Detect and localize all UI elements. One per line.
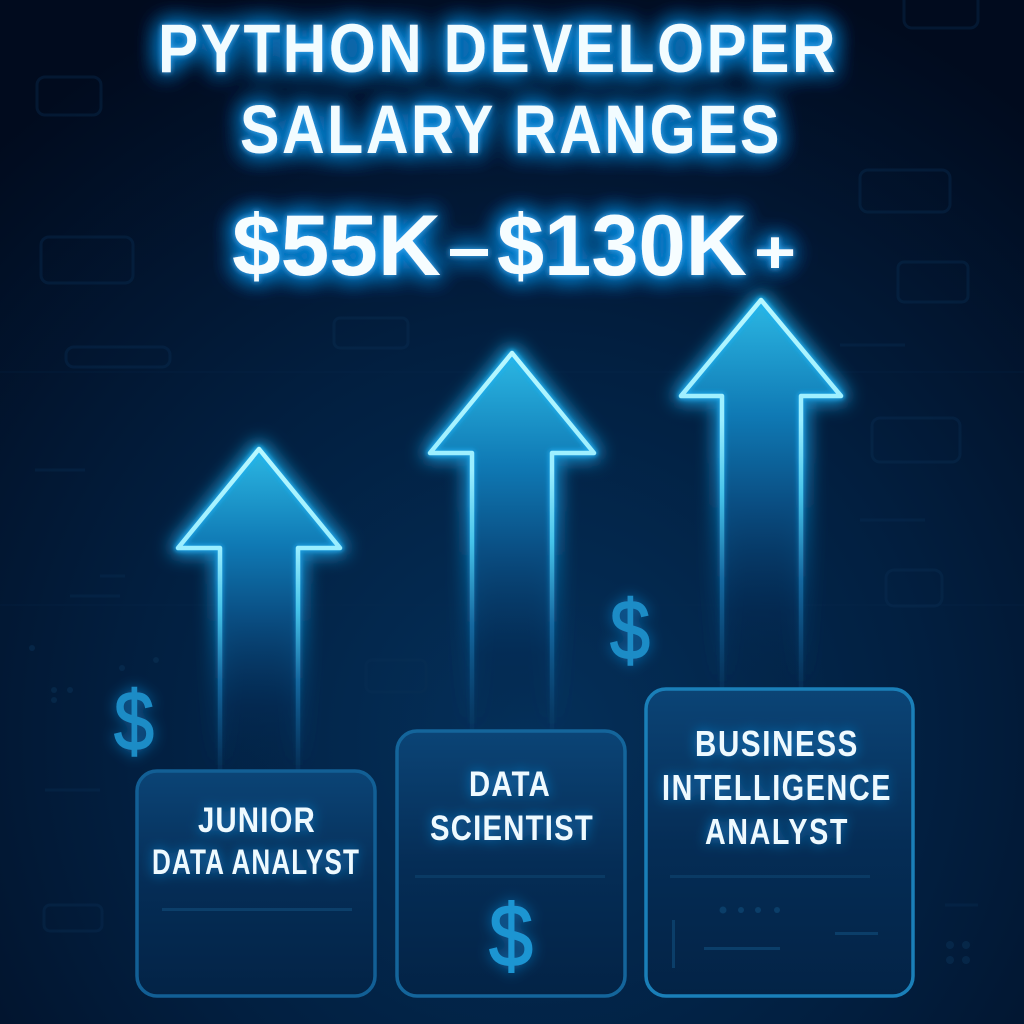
panel: business intelligence analyst (646, 689, 913, 996)
icon: dollar middle: $ (610, 583, 650, 677)
salary range: $55K (232, 198, 441, 294)
salary range: $130K (497, 198, 747, 294)
salary range: + (754, 219, 796, 286)
label: junior data analyst: DATA ANALYST (152, 843, 360, 882)
label: business intelligence analyst: INTELLIGENCE (662, 767, 892, 808)
label: junior data analyst: JUNIOR (198, 801, 316, 840)
arrow: junior data analyst (178, 449, 340, 770)
panel: junior data analyst (137, 771, 375, 996)
panel: data scientist (397, 731, 625, 996)
label: business intelligence analyst: BUSINESS (695, 723, 859, 764)
salary range (232, 198, 796, 294)
arrow: data scientist (430, 353, 594, 730)
label: data scientist: SCIENTIST (430, 809, 594, 848)
icon: dollar in panel: $ (489, 886, 533, 985)
label: data scientist (430, 765, 594, 848)
label: data scientist: DATA (469, 765, 551, 804)
title: SALARY RANGES (240, 91, 782, 168)
icon: dollar left: $ (114, 674, 154, 768)
arrow: business intelligence analyst (681, 300, 841, 688)
label: business intelligence analyst: ANALYST (705, 811, 849, 852)
title: PYTHON DEVELOPER (158, 10, 838, 87)
title (158, 10, 838, 168)
label: business intelligence analyst (662, 723, 892, 852)
label: junior data analyst (152, 801, 360, 882)
